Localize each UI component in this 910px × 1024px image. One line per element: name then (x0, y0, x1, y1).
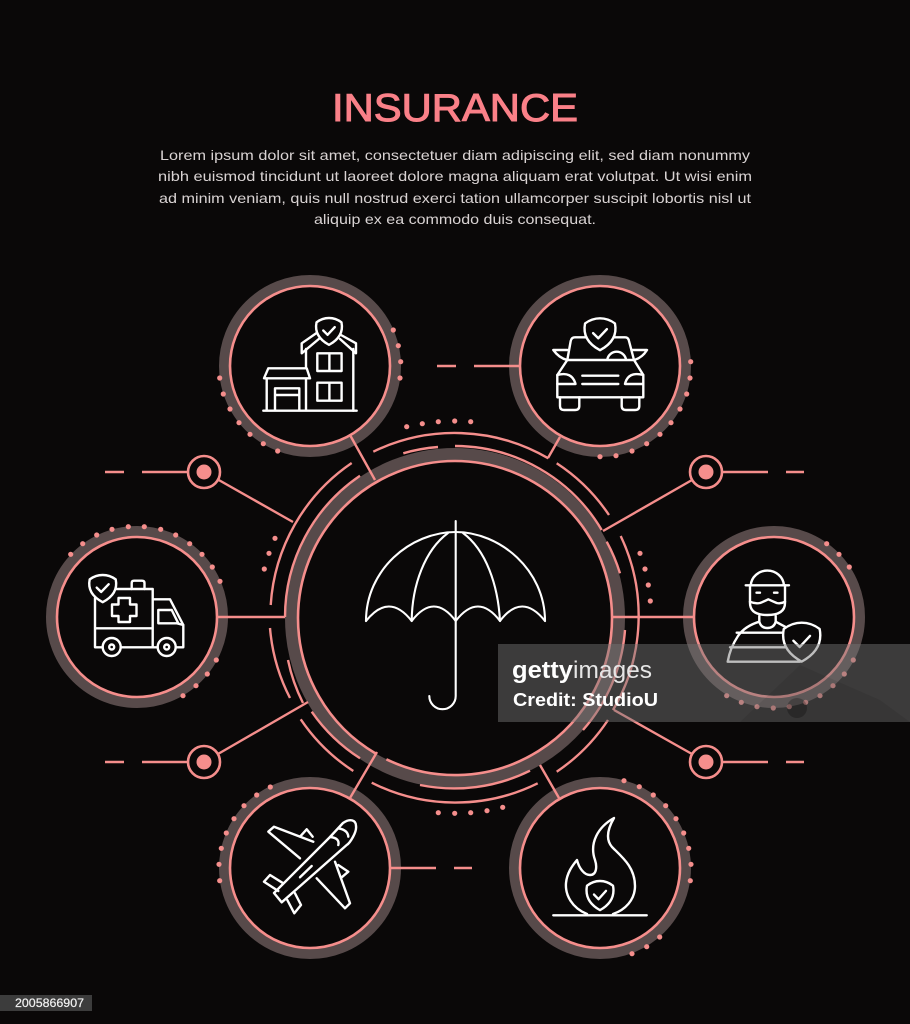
watermark banner (498, 644, 910, 722)
icon: thief with shield (728, 571, 820, 662)
node: lower left (188, 746, 220, 778)
icon: ambulance with shield (89, 575, 183, 656)
node: upper right (690, 456, 722, 488)
central hub (264, 421, 650, 813)
icon: house with shield (263, 318, 357, 411)
icon: airplane (264, 820, 356, 913)
panel: home insurance (220, 280, 401, 452)
node: lower right (690, 746, 722, 778)
title: INSURANCE (332, 87, 578, 130)
panel: theft insurance (688, 532, 860, 708)
panel: car insurance (514, 280, 691, 457)
intro paragraph: ad minim veniam, quis null nostrud exerci tation ullamcorper suscipit lobortis nisl ut (159, 190, 751, 206)
panel: fire insurance (514, 781, 691, 954)
panel: travel insurance (219, 782, 396, 954)
panel: health insurance (52, 527, 222, 702)
intro paragraph (158, 147, 752, 227)
intro paragraph: Lorem ipsum dolor sit amet, consectetuer diam adipiscing elit, sed diam nonummy (160, 147, 750, 163)
watermark banner: Credit: StudioU (513, 690, 658, 710)
icon: flame with shield (553, 818, 647, 915)
intro paragraph: nibh euismod tincidunt ut laoreet dolore magna aliquam erat volutpat. Ut wisi enim (158, 168, 752, 184)
icon: car with shield (553, 318, 647, 410)
watermark banner: images (573, 657, 652, 684)
image id stamp: 2005866907 (15, 996, 84, 1010)
node: upper left (188, 456, 220, 488)
image id stamp (0, 995, 92, 1011)
intro paragraph: aliquip ex ea commodo duis consequat. (314, 211, 596, 227)
icon: umbrella (366, 521, 545, 709)
watermark banner: getty (512, 657, 574, 684)
connector lines and nodes (105, 366, 804, 868)
